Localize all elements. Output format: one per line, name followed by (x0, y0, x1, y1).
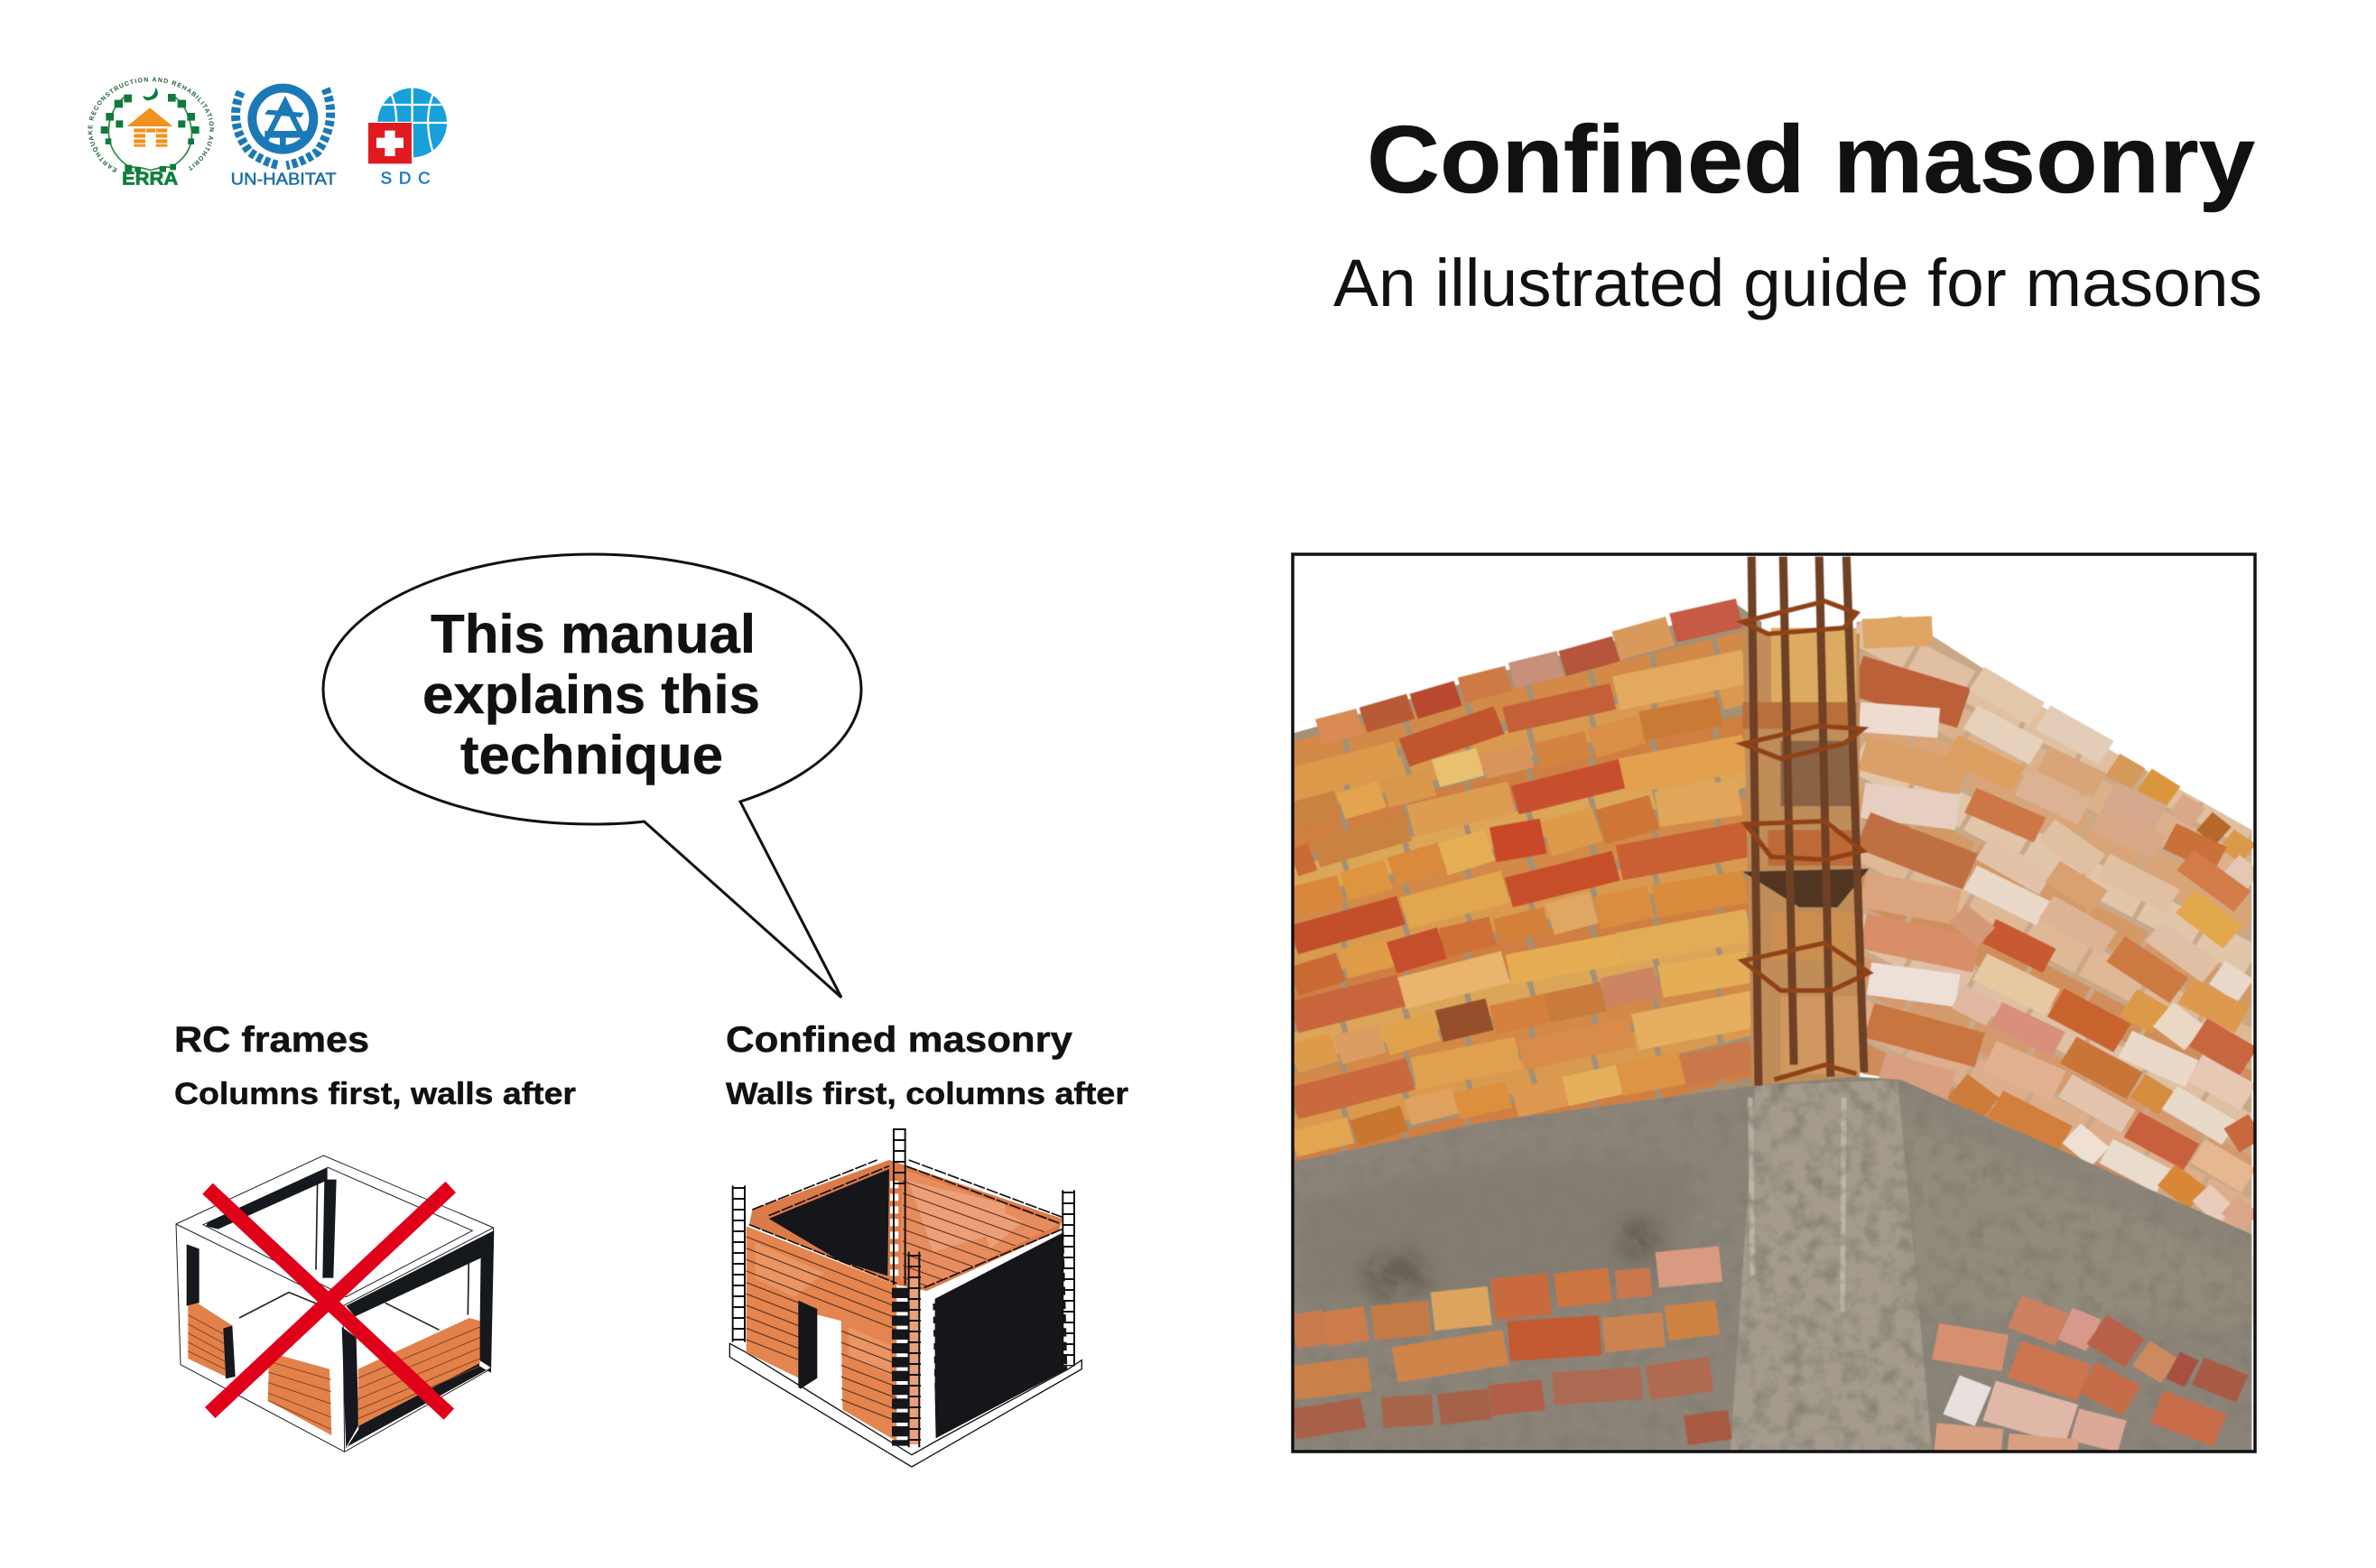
column recess (1742, 628, 1870, 1098)
lower right bricks (1935, 1312, 2242, 1448)
logo: SDC: SDC (381, 168, 431, 187)
left brick wall (1287, 604, 1787, 1217)
speech bubble (323, 554, 861, 997)
logo: ERRA: EARTHQUAKE RECONSTRUCTION AND REHABILITATION AUTHORITY (88, 78, 215, 173)
heading: Confined masonry (726, 1020, 1128, 1111)
heading: Confined masonry: Confined masonry (726, 1020, 1073, 1060)
speech bubble: This manual (431, 604, 756, 664)
logo: SDC (368, 88, 448, 187)
speech bubble: technique (460, 725, 723, 785)
lower left bricks (1294, 1264, 1730, 1431)
right brick wall (1857, 616, 2251, 1260)
corner toothing (875, 1288, 925, 1446)
front left wall (747, 1226, 896, 1442)
back right wall (900, 1169, 1059, 1288)
brick infill panels (188, 1303, 480, 1435)
heading: RC frames: RC frames (174, 1020, 369, 1060)
heading: Confined masonry: Walls first, columns after (726, 1077, 1128, 1111)
rebar cage (1742, 557, 1870, 1086)
foundation (729, 1343, 1081, 1467)
title: Confined masonry (1367, 107, 2255, 213)
photo: brick wall with rebar on concrete (1287, 554, 2255, 1454)
logo: UN-HABITAT: UN-HABITAT (231, 169, 337, 188)
wall tops (749, 1160, 1063, 1291)
door (798, 1301, 817, 1389)
logos row (88, 78, 447, 190)
right black wall (933, 1232, 1067, 1438)
red cross (208, 1187, 450, 1415)
black beams and columns (187, 1167, 494, 1449)
heading: RC frames: Columns first, walls after (174, 1077, 576, 1111)
speech bubble: explains this (422, 664, 760, 725)
logo: UN-HABITAT (231, 88, 337, 188)
illustration: RC frame crossed out (176, 1155, 494, 1452)
logo: ERRA: ERRA (122, 169, 178, 190)
logo: ERRA (88, 78, 215, 190)
concrete beam and column (1287, 1073, 2255, 1454)
rebar ladders (733, 1128, 1074, 1447)
illustration: confined masonry house (729, 1128, 1081, 1467)
back left wall (769, 1169, 889, 1276)
heading: RC frames (174, 1020, 576, 1111)
photo frame (1293, 554, 2255, 1452)
subtitle: An illustrated guide for masons (1333, 246, 2262, 320)
